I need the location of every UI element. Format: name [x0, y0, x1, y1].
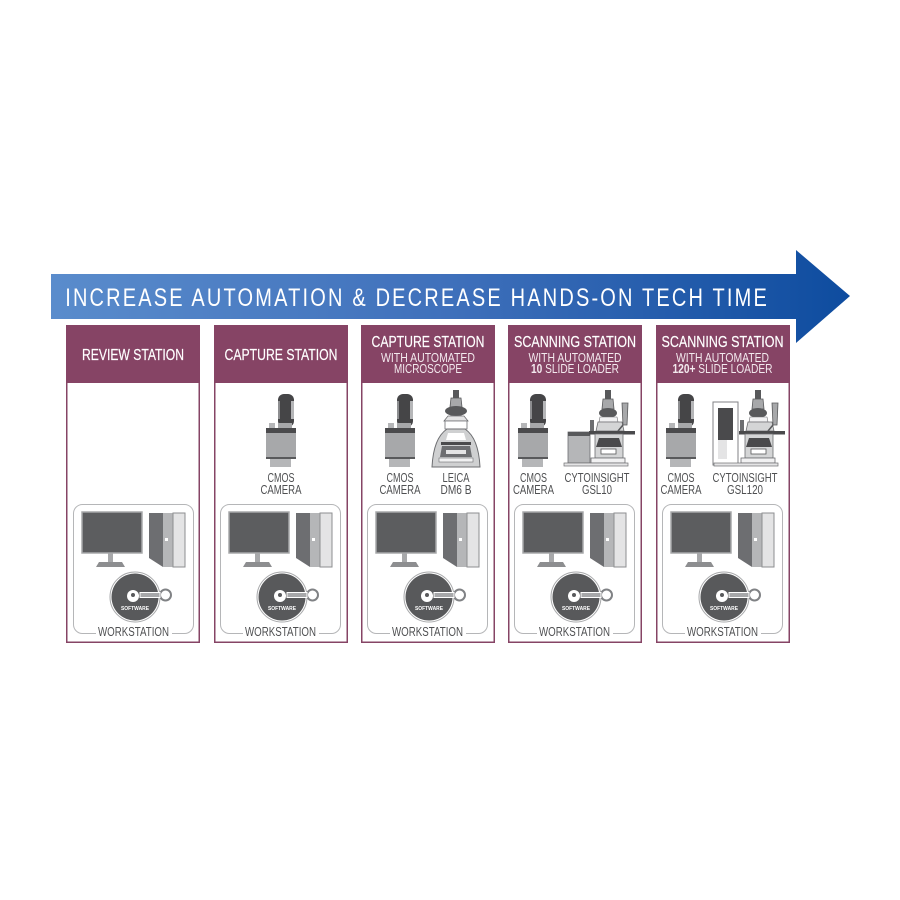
workstation icons — [662, 504, 782, 638]
camera label: CMOS — [386, 471, 414, 485]
software label: SOFTWARE — [121, 606, 149, 612]
workstation label: WORKSTATION — [392, 625, 463, 639]
software label: SOFTWARE — [268, 606, 296, 612]
camera label: CMOS — [268, 471, 294, 485]
subheading line 1: WITH AUTOMATED — [676, 351, 769, 365]
icon: cmos camera — [385, 394, 415, 467]
arrow title: INCREASE AUTOMATION & DECREASE HANDS-ON TECH TIME — [65, 284, 767, 312]
heading: capture station: CAPTURE STATION — [372, 334, 484, 351]
icon: cmos camera — [666, 394, 696, 467]
subheading line 2: 10 SLIDE LOADER — [531, 362, 619, 376]
subheading line 2: 120+ SLIDE LOADER — [672, 362, 772, 376]
leica label: LEICA — [442, 471, 470, 485]
panel: scanning station with 10 slide loader — [508, 325, 642, 642]
workstation label: WORKSTATION — [687, 625, 758, 639]
heading: scanning station: SCANNING STATION — [662, 334, 784, 351]
gsl120 label line 2: GSL120 — [727, 483, 763, 497]
heading: scanning station: SCANNING STATION — [514, 334, 636, 351]
icon: cmos camera — [266, 394, 296, 467]
subheading line 1: WITH AUTOMATED — [528, 351, 622, 365]
icon: cmos camera — [518, 394, 548, 467]
workstation icons — [220, 504, 340, 638]
camera label line 2: CAMERA — [513, 483, 555, 497]
workstation label: WORKSTATION — [539, 625, 610, 639]
workstation icons — [368, 504, 488, 638]
workstation icons — [74, 504, 194, 638]
icon: cytoinsight gsl120 — [713, 390, 785, 466]
subheading line 2: MICROSCOPE — [394, 362, 462, 376]
panel: capture station — [214, 325, 348, 642]
software label: SOFTWARE — [415, 606, 443, 612]
heading: review station: REVIEW STATION — [82, 347, 184, 364]
workstation label: WORKSTATION — [245, 625, 316, 639]
camera label line 2: CAMERA — [660, 483, 702, 497]
gsl120 label: CYTOINSIGHT — [712, 471, 778, 485]
panel: scanning station with 120+ slide loader — [656, 325, 790, 642]
camera label line 2: CAMERA — [260, 483, 302, 497]
icon: leica microscope — [432, 390, 480, 467]
gsl10 label line 2: GSL10 — [582, 483, 612, 497]
subheading line 1: WITH AUTOMATED — [381, 351, 475, 365]
arrow banner — [51, 250, 850, 343]
leica label line 2: DM6 B — [440, 483, 472, 497]
software label: SOFTWARE — [710, 606, 738, 612]
panel: capture station with automated microscope — [361, 325, 495, 642]
icon: cytoinsight gsl10 — [564, 390, 635, 466]
workstation label: WORKSTATION — [98, 625, 169, 639]
heading: capture station: CAPTURE STATION — [224, 347, 338, 364]
panel: review station — [66, 325, 200, 642]
gsl10 label: CYTOINSIGHT — [564, 471, 630, 485]
camera label: CMOS — [520, 471, 547, 485]
camera label line 2: CAMERA — [380, 483, 421, 497]
software label: SOFTWARE — [562, 606, 590, 612]
workstation icons — [514, 504, 634, 638]
camera label: CMOS — [668, 471, 694, 485]
